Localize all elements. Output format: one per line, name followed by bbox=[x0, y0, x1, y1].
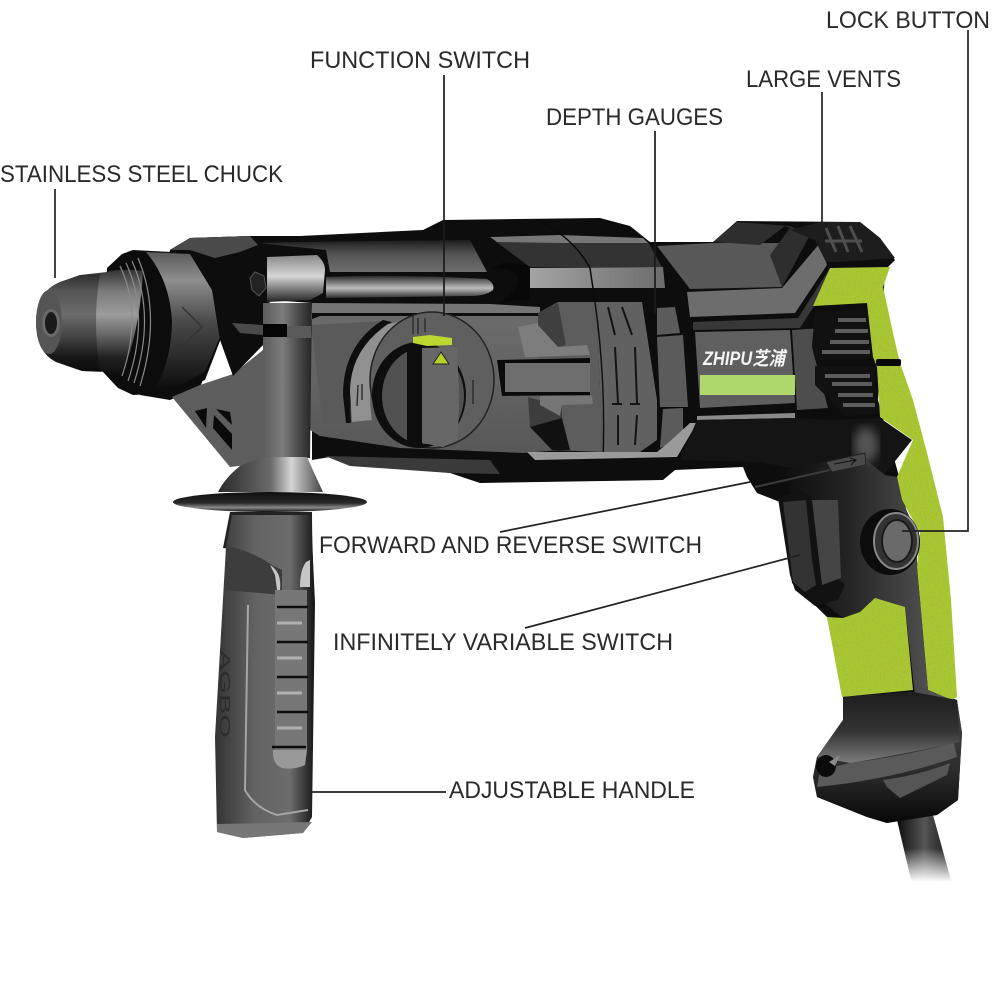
barrel dark opening bbox=[487, 262, 530, 308]
chuck nose face bbox=[36, 290, 62, 354]
function switch dial bbox=[357, 312, 494, 448]
trigger light face bbox=[783, 500, 816, 592]
main body silhouette bbox=[140, 218, 962, 823]
barrel bbox=[258, 222, 665, 313]
post band bbox=[287, 326, 311, 338]
leader: large vents bbox=[821, 92, 823, 222]
ridge slide bar shadow bbox=[497, 358, 590, 396]
panel lower rim bbox=[325, 456, 500, 474]
switch arrow bbox=[834, 458, 856, 465]
grip base bbox=[813, 692, 962, 823]
base upper shade bbox=[817, 692, 960, 763]
label: stainless steel chuck: STAINLESS STEEL CHUCK bbox=[0, 161, 284, 188]
handle band bbox=[225, 546, 282, 595]
gauge seam bbox=[595, 302, 604, 460]
chuck bore bbox=[44, 310, 58, 336]
logo side panel bbox=[695, 330, 795, 408]
gauge drum bbox=[596, 302, 657, 453]
gauge lower highlight bbox=[527, 423, 697, 460]
leader: function switch bbox=[443, 75, 445, 316]
base light band bbox=[817, 743, 957, 787]
lower vent bbox=[815, 366, 878, 416]
gauge slots bbox=[608, 307, 640, 445]
handle flange bbox=[173, 492, 367, 512]
knob front bbox=[422, 347, 459, 447]
green upper grip bbox=[813, 267, 957, 700]
upper casing top light band bbox=[490, 235, 648, 243]
casing seam bbox=[542, 222, 595, 302]
handle rib bottom light bbox=[273, 750, 307, 769]
chuck nose bbox=[36, 270, 143, 376]
leader: stainless steel chuck bbox=[54, 189, 56, 278]
post bbox=[263, 303, 312, 458]
rib triangle bbox=[172, 350, 263, 467]
motor housing ridge bbox=[687, 243, 827, 317]
leader: lock button bbox=[902, 30, 968, 531]
infinitely variable switch trigger bbox=[778, 490, 845, 606]
green band bbox=[700, 375, 795, 395]
lock button outer ring bbox=[874, 513, 918, 569]
lower belly bbox=[680, 418, 912, 500]
chuck gray collar bbox=[146, 252, 222, 391]
clamp band bbox=[232, 323, 263, 335]
function panel bbox=[310, 316, 560, 474]
handle body bbox=[215, 515, 315, 838]
collar black upper bbox=[170, 236, 270, 376]
gauge right block bbox=[657, 307, 688, 448]
base lower inset bbox=[883, 763, 950, 798]
lower side rim bbox=[697, 413, 795, 420]
handle embossed brand: AGBO bbox=[216, 650, 233, 738]
motor housing top face bbox=[657, 243, 790, 289]
handle rib panel bbox=[275, 590, 307, 750]
handle bottom band bbox=[217, 822, 312, 838]
label: forward and reverse switch: FORWARD AND REVERSE SWITCH bbox=[319, 532, 702, 559]
chuck black band bbox=[103, 250, 223, 395]
central gray panel bbox=[310, 316, 560, 453]
top black crest bbox=[790, 222, 895, 262]
ridge slide bar bbox=[505, 363, 590, 392]
handle ribs bbox=[272, 607, 308, 747]
trigger body bbox=[778, 490, 845, 606]
motor housing top block bbox=[713, 222, 810, 287]
green lower grip bbox=[827, 598, 913, 697]
label: large vents: LARGE VENTS bbox=[746, 66, 901, 93]
side clamp and ribs bbox=[170, 236, 325, 467]
upper vent bbox=[812, 308, 872, 360]
ridge lower highlight bbox=[540, 396, 593, 416]
grip gray spine bbox=[785, 455, 952, 700]
leader: forward and reverse switch bbox=[500, 482, 750, 532]
chuck nose front shade bbox=[36, 274, 100, 372]
handle top highlight bbox=[270, 560, 310, 590]
label: depth gauges: DEPTH GAUGES bbox=[546, 104, 723, 131]
dial recess ring bbox=[372, 342, 466, 448]
handle raised inset outline bbox=[245, 605, 308, 815]
label: lock button: LOCK BUTTON bbox=[826, 7, 990, 34]
ridge lower shadow bbox=[530, 418, 570, 450]
clamp cylinder bbox=[267, 255, 325, 302]
post black notch bbox=[263, 324, 287, 337]
label: function switch: FUNCTION SWITCH bbox=[310, 47, 530, 74]
chevron mark bbox=[181, 307, 202, 347]
power cord bbox=[890, 815, 965, 888]
barrel upper shell bbox=[258, 240, 487, 272]
housing strip below ridge bbox=[693, 268, 836, 330]
motor housing bbox=[657, 222, 912, 500]
cross-shaped gearbox ridges bbox=[497, 303, 593, 450]
knob green lever bbox=[413, 335, 452, 346]
switch rail bbox=[755, 470, 830, 487]
slit in green grip bbox=[876, 359, 901, 366]
handle cone bbox=[218, 457, 323, 492]
panel arc highlight bbox=[350, 322, 407, 422]
switch paddle bbox=[826, 453, 866, 472]
panel left face bbox=[311, 321, 382, 423]
upper vent slats bbox=[822, 320, 870, 352]
ring collar light bbox=[171, 236, 258, 258]
label: infinitely variable switch: INFINITELY VARIABLE SWITCH bbox=[333, 629, 673, 656]
dial plate bbox=[370, 312, 494, 448]
forward and reverse switch bbox=[755, 453, 866, 487]
lock button socket bbox=[860, 509, 920, 575]
label: adjustable handle: ADJUSTABLE HANDLE bbox=[449, 777, 695, 804]
rear side panel bbox=[792, 328, 828, 410]
leader: depth gauges bbox=[654, 131, 656, 313]
handle rib highlights bbox=[277, 623, 302, 728]
upper casing dark band bbox=[495, 241, 662, 267]
bolt hex bbox=[250, 272, 266, 296]
panel arc shadow bbox=[343, 320, 392, 423]
lower gray band bbox=[312, 303, 540, 313]
grip soft highlight bbox=[854, 427, 878, 463]
leader: infinitely variable switch bbox=[525, 555, 800, 628]
stainless steel chuck bbox=[36, 250, 223, 395]
upper casing light band bbox=[530, 267, 665, 288]
side vents bbox=[812, 308, 878, 416]
leader: adjustable handle bbox=[312, 791, 446, 793]
chuck thread rings bbox=[120, 258, 151, 386]
handle neck bbox=[223, 512, 313, 560]
base shape bbox=[813, 692, 962, 823]
ridge upper shadow bbox=[538, 303, 566, 347]
cord hole glint bbox=[829, 755, 840, 766]
dial inner bbox=[382, 348, 464, 444]
large vents slots bbox=[825, 226, 862, 252]
lock button bbox=[860, 509, 920, 575]
rib holes bbox=[195, 408, 232, 450]
brand logo: ZHIPU芝浦 bbox=[702, 348, 788, 370]
lock button cap bbox=[882, 520, 912, 562]
knob green arrow bbox=[433, 352, 449, 364]
adjustable handle bbox=[173, 457, 367, 838]
gauge shoulder bbox=[538, 302, 603, 452]
knob black face bbox=[407, 347, 423, 444]
lower vent slats bbox=[825, 376, 875, 405]
dial symbols bbox=[357, 316, 473, 406]
cord hole bbox=[816, 755, 836, 777]
trigger slot bbox=[812, 500, 841, 585]
depth gauge housing bbox=[527, 302, 697, 460]
drill illustration bbox=[36, 218, 965, 888]
ridge upper block bbox=[518, 323, 590, 357]
ridge lower block bbox=[528, 397, 562, 427]
barrel highlight tube bbox=[326, 276, 493, 298]
